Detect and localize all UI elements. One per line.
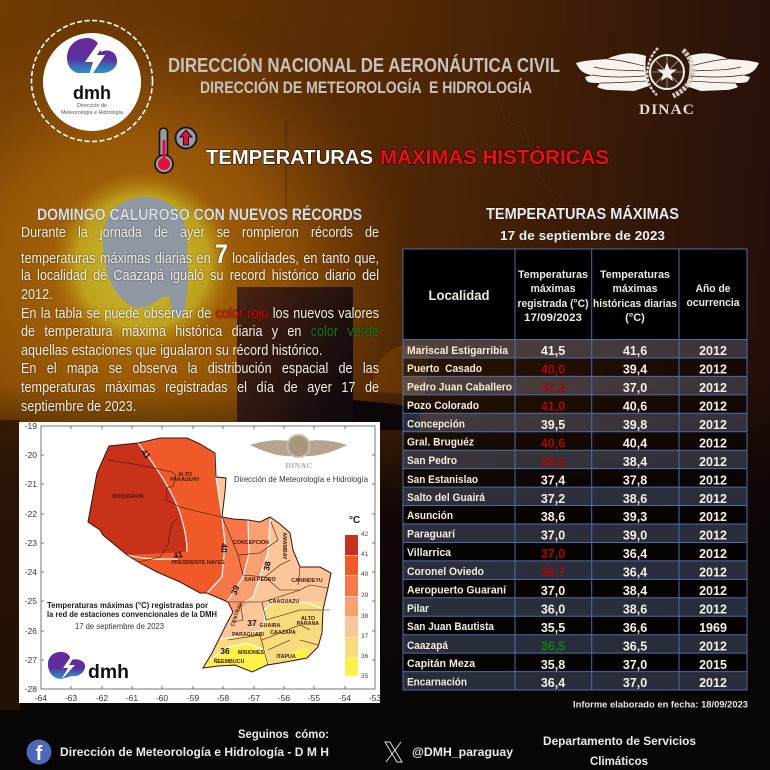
map axis labels: -55: [308, 693, 320, 703]
map: legend: 40: [361, 571, 369, 578]
table: registered temperature column: 35,8: [541, 658, 565, 672]
map axis labels: -63: [65, 693, 77, 703]
table heading: [486, 206, 679, 243]
table: historical temperature column: [623, 344, 647, 690]
table: historical temperature column: 39,3: [623, 510, 647, 524]
table: historical temperature column: 38,6: [623, 602, 647, 616]
map: dmh logo: dmh: [88, 661, 129, 683]
map: isoline labels: 38: [261, 560, 273, 572]
map: caption: 17 de septiembre de 2023: [75, 622, 164, 631]
table: historical temperature column: 40,4: [623, 436, 647, 450]
table: year column: 2012: [699, 455, 727, 469]
table: historical temperature column: 37,8: [623, 474, 647, 488]
footer: follow us: [26, 729, 329, 765]
table: year column: 2012: [699, 602, 727, 616]
text block: explanation paragraph: 2012.: [21, 286, 53, 303]
map: department borders: [88, 438, 331, 672]
map: isoline labels: 37: [247, 618, 257, 628]
table: locality column: Gral. Bruguéz: [407, 436, 474, 448]
table header: históricas diarias: [593, 298, 677, 310]
table header: máximas: [612, 283, 658, 295]
table: locality column: Concepción: [407, 418, 465, 430]
table: registered temperature column: 40,6: [541, 436, 565, 450]
map: isolines: [127, 443, 323, 666]
footer: department: [543, 734, 696, 768]
table: registered temperature column: 41,0: [541, 400, 565, 414]
table: locality column: San Estanislao: [407, 474, 478, 486]
logo: DINAC wings: DINAC: [639, 102, 695, 118]
icon: facebook: [26, 740, 52, 765]
table: registered temperature column: 36,7: [541, 566, 565, 580]
map: isoline labels: 40: [219, 543, 229, 553]
main title: [206, 145, 609, 169]
heading: institution: DIRECCIÓN DE METEOROLOGÍA E HIDROLOGÍA: [200, 78, 532, 97]
heading: left column: DOMINGO CALUROSO CON NUEVOS RÉCORDS: [37, 205, 362, 224]
map: watermark DINAC wings: DINAC: [285, 461, 313, 470]
text block: explanation paragraph: aquellas estaciones que igualaron su récord histórico.: [21, 342, 322, 359]
table: historical temperature column: 38,4: [623, 455, 647, 469]
table: registered temperature column: 40,0: [541, 362, 565, 376]
table: locality column: Caazapá: [407, 640, 449, 652]
table: locality column: Pilar: [407, 603, 430, 615]
map axis labels: -28: [25, 684, 37, 694]
logo: dmh circle: Dirección de: [77, 103, 107, 109]
logo: dmh circle: [32, 20, 152, 142]
table: locality column: [407, 345, 512, 688]
map: department labels: CAAGUAZU: [269, 599, 299, 605]
table: year column: 2012: [699, 510, 727, 524]
table header: [403, 249, 747, 340]
table: locality column: Pozo Colorado: [407, 400, 479, 412]
map: isoline labels: [139, 447, 273, 656]
report date note: Informe elaborado en fecha: 18/09/2023: [573, 700, 748, 710]
table: locality column: San Juan Bautista: [407, 621, 495, 633]
map: legend: 39: [361, 592, 369, 599]
table: historical temperature column: 37,0: [623, 381, 647, 395]
map: caption: la red de estaciones convencionales de la DMH: [47, 610, 217, 619]
map: isoline labels: 41: [139, 447, 153, 461]
table: registered temperature column: 37,0: [541, 584, 565, 598]
table header: ocurrencia: [686, 297, 740, 309]
table: year column: 2012: [699, 400, 727, 414]
table: locality column: Capitán Meza: [407, 658, 476, 670]
table: year column: 2012: [699, 676, 727, 690]
table: historical temperature column: 36,4: [623, 547, 647, 561]
table: year column: 2012: [699, 474, 727, 488]
icon: X logo: [385, 742, 402, 762]
table header: Temperaturas: [600, 269, 670, 281]
table: locality column: Pedro Juan Caballero: [407, 382, 512, 394]
table: year column: 2012: [699, 381, 727, 395]
map panel: [19, 421, 381, 703]
table: year column: 2012: [699, 418, 727, 432]
map axis labels: -62: [96, 693, 108, 703]
map: legend: °C: [349, 515, 360, 526]
table: registered temperature column: 35,5: [541, 621, 565, 635]
map: legend: 37: [361, 633, 369, 640]
map: department labels: [112, 472, 323, 665]
table header: 17/09/2023: [524, 312, 582, 324]
table: registered temperature column: 37,4: [541, 474, 565, 488]
table: historical temperature column: 36,6: [623, 621, 647, 635]
map: dmh logo: [48, 652, 129, 683]
text block: explanation paragraph: temperaturas máximas diarias en 7 localidades, en tanto que,: [21, 239, 379, 269]
table: year column: 2012: [699, 584, 727, 598]
map: department labels: CAAZAPA: [270, 630, 296, 636]
table: locality column: Encarnación: [407, 676, 467, 688]
logo: DINAC wings: [576, 48, 759, 118]
icon: facebook: f: [36, 743, 43, 765]
map: agency name: Dirección de Meteorología e Hidrología: [234, 474, 368, 484]
map: department labels: CENTRAL: [230, 601, 244, 628]
map axis labels: -27: [25, 655, 37, 665]
map axis labels: -56: [278, 693, 290, 703]
map: caption: Temperaturas máximas (°C) registradas por: [47, 601, 208, 610]
text block: explanation paragraph: En la tabla se puede observar de color rojo los nuevos valores: [21, 305, 379, 322]
map: caption: [47, 601, 217, 631]
map: department labels: CANINDEYU: [291, 578, 323, 584]
table: locality column: Salto del Guairá: [407, 492, 486, 504]
table: historical temperature column: 41,6: [623, 344, 647, 358]
map: isoline labels: 41: [172, 549, 184, 561]
table header: Año de: [696, 283, 730, 295]
footer: department: Climáticos: [590, 754, 648, 768]
map axis labels: -59: [187, 693, 199, 703]
table header: Localidad: [428, 287, 490, 303]
map axis labels: -58: [217, 693, 229, 703]
table: historical temperature column: 36,5: [623, 640, 647, 654]
map: department labels: PARANA: [297, 621, 319, 627]
map axes: [41, 426, 375, 689]
table header: (°C): [625, 312, 645, 324]
table header: máximas: [530, 283, 576, 295]
map: legend: 41: [361, 551, 369, 558]
table: year column: 2012: [699, 566, 727, 580]
map: legend: 35: [361, 673, 369, 680]
table: year column: 2012: [699, 436, 727, 450]
table: registered temperature column: 36,4: [541, 676, 565, 690]
map: department labels: MISIONES: [238, 650, 264, 656]
map axis labels: -22: [25, 509, 37, 519]
table: year column: 2015: [699, 658, 727, 672]
map: department labels: GUAIRA: [260, 623, 281, 629]
map: department labels: PARAGUARI: [232, 632, 264, 638]
map: department labels: BOQUERON: [112, 494, 144, 500]
map: department labels: AMAMBAY: [281, 532, 287, 560]
map: department labels: SAN PEDRO: [244, 577, 276, 583]
map axis labels: -24: [25, 567, 37, 577]
map axis labels: -57: [248, 693, 260, 703]
table: registered temperature column: 36,0: [541, 602, 565, 616]
table: year column: 2012: [699, 528, 727, 542]
map axis labels: -64: [35, 693, 47, 703]
table: year column: 2012: [699, 492, 727, 506]
map axis labels: -25: [25, 596, 37, 606]
table: locality column: Puerto Casado: [407, 363, 482, 375]
text block: explanation paragraph: temperaturas máximas registradas el día de ayer 17 de: [21, 379, 379, 396]
map axis labels: -54: [339, 693, 351, 703]
map: department labels: ALTO: [301, 616, 315, 622]
table: historical temperature column: 39,4: [623, 362, 647, 376]
map: department labels: CONCEPCION: [233, 540, 269, 546]
table: historical temperature column: 38,4: [623, 584, 647, 598]
table: year column: 1969: [699, 621, 727, 635]
logo: dmh circle: Meteorología e Hidrología: [61, 110, 123, 116]
logo: dmh circle: dmh: [73, 82, 111, 103]
table: historical temperature column: 37,0: [623, 676, 647, 690]
main title: MÁXIMAS HISTÓRICAS: [380, 145, 609, 169]
map axis labels: -20: [25, 450, 37, 460]
map: department labels: ALTO: [178, 472, 192, 478]
table: historical temperature column: 39,0: [623, 528, 647, 542]
icon: thermometer with up arrow: [155, 128, 196, 173]
table: year column: [699, 344, 727, 690]
footer: facebook name: Dirección de Meteorología e Hidrología - D M H: [60, 745, 329, 759]
footer: department: Departamento de Servicios: [543, 734, 696, 748]
table: locality column: Mariscal Estigarribia: [407, 345, 509, 357]
footer: follow us: Seguinos cómo:: [238, 729, 329, 741]
map axis labels: [25, 421, 381, 703]
table: historical temperature column: 39,8: [623, 418, 647, 432]
table row fills: [403, 340, 747, 690]
table: registered temperature column: 39,5: [541, 418, 565, 432]
table: registered temperature column: 37,0: [541, 547, 565, 561]
map axis labels: -23: [25, 538, 37, 548]
table: locality column: Aeropuerto Guaraní: [407, 584, 507, 596]
table: year column: 2012: [699, 344, 727, 358]
footer: X handle: @DMH_paraguay: [412, 745, 513, 759]
map: Paraguay temperature bands: [88, 438, 330, 672]
map: legend: 36: [361, 653, 369, 660]
table: historical temperature column: 36,4: [623, 566, 647, 580]
table header: Temperaturas: [518, 269, 588, 281]
map axis labels: -19: [25, 421, 37, 431]
map: department labels: PRESIDENTE HAYES: [171, 560, 225, 566]
map: department labels: ÑEEMBUCU: [214, 658, 244, 665]
map: department labels: PARAGUAY: [170, 477, 200, 483]
table: locality column: Paraguarí: [407, 528, 456, 540]
map: legend: [345, 515, 369, 680]
map axis labels: -21: [25, 479, 37, 489]
map axis labels: -53: [369, 693, 381, 703]
table: locality column: Asunción: [407, 510, 453, 522]
heading: institution: [168, 53, 560, 97]
main title: TEMPERATURAS: [206, 146, 373, 169]
table: registered temperature column: 37,2: [541, 381, 565, 395]
map: department labels: ITAPUA: [276, 654, 296, 660]
table: historical temperature column: 37,0: [623, 658, 647, 672]
table: registered temperature column: 37,2: [541, 492, 565, 506]
text block: explanation paragraph: Durante la jornada de ayer se rompieron récords de: [21, 224, 379, 241]
table: historical temperature column: 40,6: [623, 400, 647, 414]
map: isoline labels: 39: [229, 584, 241, 596]
table heading: 17 de septiembre de 2023: [500, 228, 665, 243]
map: watermark DINAC wings: [250, 435, 347, 470]
text block: explanation paragraph: En el mapa se observa la distribución espacial de las: [21, 360, 379, 377]
map axis labels: -61: [126, 693, 138, 703]
table: registered temperature column: 38,6: [541, 510, 565, 524]
table: registered temperature column: [541, 344, 565, 690]
table: [403, 249, 747, 690]
table: registered temperature column: 36,5: [541, 640, 565, 654]
text block: explanation paragraph: de temperatura máxima histórica diaria y en color verde: [21, 323, 379, 340]
table: locality column: San Pedro: [407, 455, 457, 467]
table: year column: 2012: [699, 547, 727, 561]
text block: explanation paragraph: la localidad de Caazapá igualó su record histórico diario del: [21, 267, 379, 284]
text block: explanation paragraph: [20, 224, 380, 415]
table: registered temperature column: 37,0: [541, 528, 565, 542]
heading: institution: DIRECCIÓN NACIONAL DE AERONÁUTICA CIVIL: [168, 53, 560, 77]
table: historical temperature column: 38,6: [623, 492, 647, 506]
table heading: TEMPERATURAS MÁXIMAS: [486, 206, 679, 223]
map axis labels: -60: [156, 693, 168, 703]
map: isoline labels: 36: [220, 646, 230, 656]
table header: registrada (°C): [518, 298, 589, 310]
table: locality column: Coronel Oviedo: [407, 566, 484, 578]
table: year column: 2012: [699, 640, 727, 654]
map: legend: 38: [361, 613, 369, 620]
table: registered temperature column: 41,5: [541, 344, 565, 358]
table: registered temperature column: 38,6: [541, 455, 565, 469]
map axis labels: -26: [25, 626, 37, 636]
table: year column: 2012: [699, 362, 727, 376]
text block: explanation paragraph: septiembre de 2023.: [21, 398, 136, 415]
map: legend: 42: [361, 531, 369, 538]
table: locality column: Villarrica: [407, 547, 452, 559]
